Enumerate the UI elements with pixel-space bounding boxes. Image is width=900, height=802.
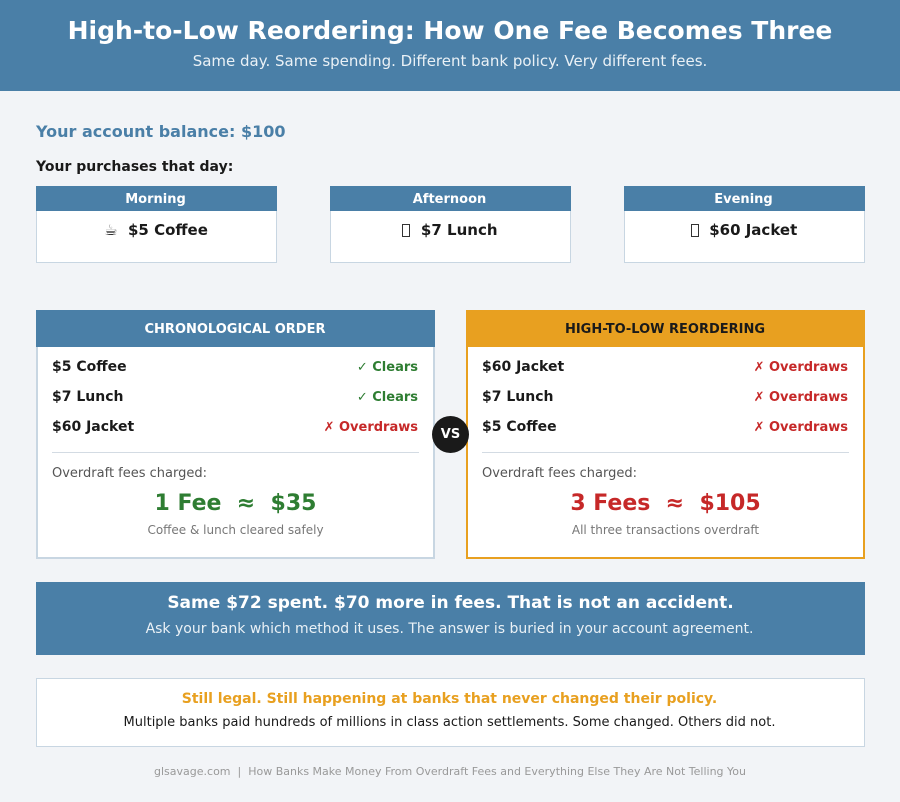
card header: evening: [624, 186, 865, 211]
footer: glsavage.com | How Banks Make Money From Overdraft Fees and Everything Else They Are Not Telling You: [154, 765, 746, 778]
summary subtext: Ask your bank which method it uses. The answer is buried in your account agreement.: [146, 621, 753, 637]
panel header: chronological: CHRONOLOGICAL ORDER: [145, 322, 325, 337]
subtitle: Same day. Same spending. Different bank policy. Very different fees.: [193, 52, 707, 70]
row: jacket overdraws: ✗ Overdraws: [754, 360, 848, 375]
row: lunch overdraws: [482, 389, 848, 405]
callout headline: Still legal. Still happening at banks that never changed their policy.: [182, 691, 717, 707]
card header: morning: [36, 186, 277, 211]
row: coffee clears: [52, 359, 418, 375]
purchase: jacket: $60 Jacket: [709, 221, 797, 239]
row: lunch clears: ✓ Clears: [357, 390, 418, 405]
row: coffee clears: ✓ Clears: [357, 360, 418, 375]
purchases heading: Your purchases that day:: [36, 159, 233, 175]
fees label: Overdraft fees charged:: [52, 466, 207, 481]
panel: chronological order: [36, 310, 435, 559]
fees label: Overdraft fees charged:: [482, 466, 637, 481]
row: coffee overdraws: ✗ Overdraws: [754, 420, 848, 435]
summary banner: [36, 582, 865, 655]
vs badge: [432, 416, 469, 453]
callout body: Multiple banks paid hundreds of millions in class action settlements. Some changed. Others did not.: [124, 715, 775, 730]
row: jacket overdraws: $60 Jacket: [52, 419, 134, 435]
card: evening purchase: [624, 186, 865, 263]
card header: afternoon: [330, 186, 571, 211]
row: lunch clears: [52, 389, 418, 405]
panel header: high-to-low: [466, 310, 865, 347]
vs badge: VS: [441, 427, 460, 442]
fee note: All three transactions overdraft: [572, 523, 759, 537]
row: lunch overdraws: ✗ Overdraws: [754, 390, 848, 405]
fee note: Coffee & lunch cleared safely: [147, 523, 324, 537]
panel header: chronological: [36, 310, 435, 347]
card header: morning: Morning: [125, 192, 186, 207]
row: jacket overdraws: [482, 359, 848, 375]
row: lunch overdraws: $7 Lunch: [482, 389, 553, 405]
card header: evening: Evening: [714, 192, 773, 207]
fee total: one fee: 1 Fee ≈ $35: [155, 491, 316, 516]
purchase: lunch: $7 Lunch: [421, 221, 498, 239]
row: jacket overdraws: [52, 419, 418, 435]
card header: afternoon: Afternoon: [413, 192, 486, 207]
account balance heading: Your account balance: $100: [36, 122, 285, 141]
panel: high-to-low reordering: [466, 310, 865, 559]
title: High-to-Low Reordering: How One Fee Becomes Three: [68, 16, 832, 45]
row: lunch clears: $7 Lunch: [52, 389, 123, 405]
summary headline: Same $72 spent. $70 more in fees. That is not an accident.: [167, 593, 734, 613]
row: coffee clears: $5 Coffee: [52, 359, 127, 375]
row: jacket overdraws: ✗ Overdraws: [324, 420, 418, 435]
fee total: three fees: 3 Fees ≈ $105: [570, 491, 761, 516]
panel header: high-to-low: HIGH-TO-LOW REORDERING: [565, 322, 765, 337]
header banner: [0, 0, 900, 91]
row: jacket overdraws: $60 Jacket: [482, 359, 564, 375]
row: coffee overdraws: [482, 419, 848, 435]
card: afternoon purchase: [330, 186, 571, 263]
legal callout: [36, 678, 865, 747]
row: coffee overdraws: $5 Coffee: [482, 419, 557, 435]
card: morning purchase: [36, 186, 277, 263]
purchase: coffee: ☕ $5 Coffee: [104, 221, 208, 239]
